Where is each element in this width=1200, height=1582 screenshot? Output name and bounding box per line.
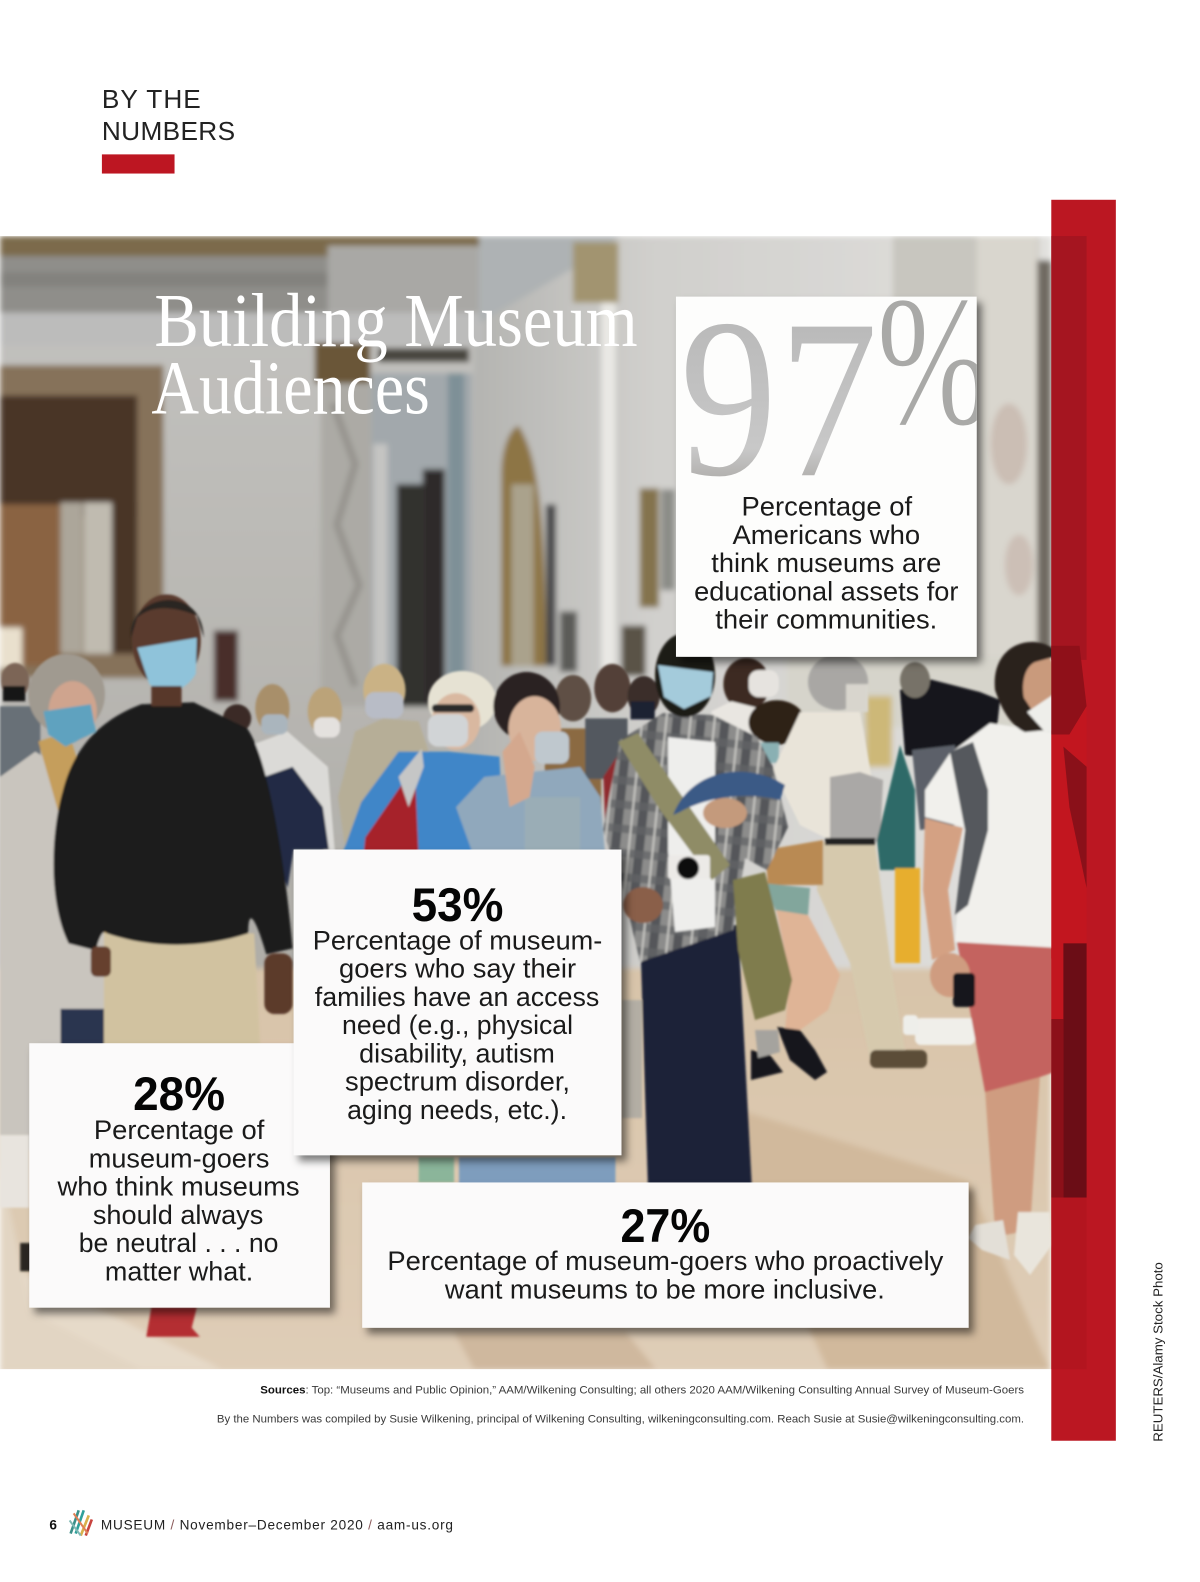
page number: 6: [49, 1518, 57, 1533]
panel: 53 percent: 53%: [412, 879, 503, 932]
panel: 97 percent: their communities.: [715, 604, 937, 635]
title: Audiences: [151, 346, 430, 431]
photo credit: REUTERS/Alamy Stock Photo: [1151, 1262, 1165, 1442]
panel: 28 percent: should always: [93, 1199, 263, 1230]
man in black with backpack: [877, 662, 1000, 1045]
section label: By the Numbers: NUMBERS: [102, 116, 235, 146]
panel: 53 percent: Percentage of museum-: [313, 924, 602, 955]
panel: 53 percent: goers who say their: [339, 953, 576, 984]
upper cornice and marble: [0, 236, 328, 256]
panel: 53 percent: spectrum disorder,: [345, 1066, 570, 1097]
panel: 28 percent: who think museums: [57, 1171, 300, 1202]
central man in black shirt and mask: [53, 594, 293, 1049]
white jacket man: [751, 654, 927, 1080]
floor: [0, 969, 1051, 1372]
panel: 53 percent: aging needs, etc.).: [347, 1094, 567, 1125]
doorway: [0, 365, 163, 678]
young woman with hand raised: [419, 672, 615, 1188]
panel: 53 percent: families have an access: [315, 981, 599, 1012]
panel: 27 percent: Percentage of museum-goers who proactively: [387, 1245, 944, 1276]
panel: 28 percent: be neutral . . . no: [79, 1227, 278, 1258]
photo: masked museum visitors in gallery: [0, 236, 1060, 1372]
panel: 97 percent: [676, 259, 990, 657]
visitor in plaid shirt with camera: [603, 633, 792, 1190]
panel: 97 percent: think museums are: [711, 547, 941, 578]
panel: 53 percent: disability, autism: [359, 1037, 555, 1068]
large number: 97%: 7: [779, 274, 878, 525]
man in white polo and red shorts: [923, 642, 1060, 1275]
red shoe: [146, 1308, 200, 1337]
title: Building Museum: [154, 278, 638, 363]
panel: 97 percent: educational assets for: [694, 575, 958, 606]
panel: 97 percent: Percentage of: [742, 491, 912, 522]
framed paintings: [501, 426, 546, 666]
icon: AAM logo: [70, 1510, 92, 1536]
panel: 53 percent: need (e.g., physical: [342, 1009, 573, 1040]
title: [151, 278, 638, 431]
far corridor: [371, 373, 472, 706]
sources and credit text: By the Numbers was compiled by Susie Wilkening, principal of Wilkening Consulting, wilkeningconsulting.com. Reach Susie at Susie@wilkeningconsulting.com.: [217, 1414, 1024, 1426]
panel: 28 percent: museum-goers: [89, 1142, 269, 1173]
panel: 27 percent: [362, 1182, 969, 1328]
panel: 28 percent: Percentage of: [94, 1114, 265, 1145]
figures drawn to true-scale coordinates: [603, 633, 1060, 1275]
marble pillar right: [892, 236, 978, 304]
marble column: [321, 383, 371, 706]
section label: By the Numbers: [102, 84, 235, 174]
background crowd: [0, 658, 805, 888]
sources and credit text: Sources: Top: “Museums and Public Opinion,” AAM/Wilkening Consulting; all others 2020 AAM/Wilkening Consulting Annual Survey of Museum-Goers: [260, 1384, 1025, 1396]
grey-haired woman with scarf: [0, 654, 116, 1271]
panel: 27 percent: want museums to be more inclusive.: [444, 1273, 885, 1304]
sources and credit text: [217, 1384, 1025, 1426]
panel: 27 percent: 27%: [620, 1200, 710, 1253]
panel: 97 percent: Americans who: [732, 519, 920, 550]
red tint over photo right edge: [1051, 236, 1087, 1369]
panel: 28 percent: [29, 1043, 330, 1308]
large number: 97%: 9: [680, 273, 777, 524]
section label: By the Numbers: BY THE: [102, 84, 201, 114]
large number: 97%: [686, 300, 977, 476]
white-haired woman in blue: [341, 671, 504, 858]
red vertical band: [1051, 200, 1116, 1441]
panel: 28 percent: matter what.: [105, 1255, 253, 1286]
panel: 28 percent: 28%: [133, 1068, 225, 1121]
footer text: MUSEUM / November–December 2020 / aam-us.org: [101, 1518, 453, 1533]
large number: 97%: %: [877, 259, 990, 465]
panel: 53 percent: [294, 850, 621, 1155]
